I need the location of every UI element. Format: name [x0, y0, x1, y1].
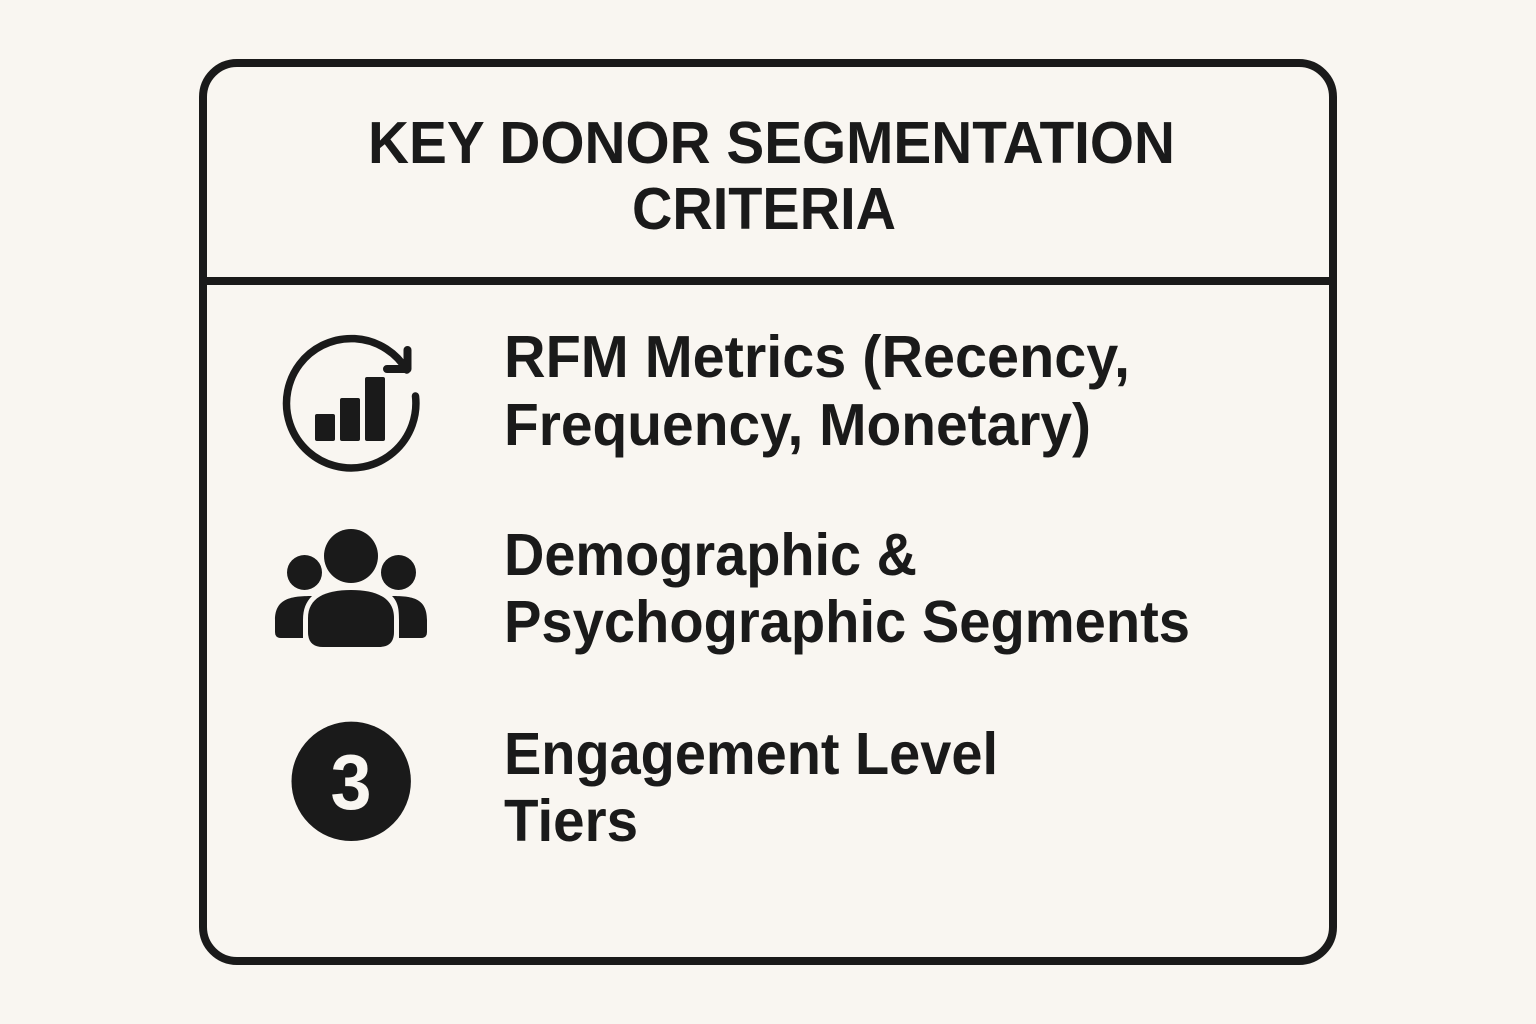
- text: engagement level tiers: Tiers: [504, 788, 638, 854]
- text: RFM metrics: RFM Metrics (Recency,: [504, 324, 1130, 390]
- text: demographic and psychographic segments: [504, 522, 1190, 655]
- icon: number three badge: [292, 722, 411, 841]
- icon: circular arrow with bar chart: [287, 339, 416, 468]
- text: RFM metrics: [504, 324, 1130, 458]
- title: KEY DONOR SEGMENTATION: [368, 110, 1175, 176]
- panel: criteria card: [203, 63, 1333, 961]
- text: engagement level tiers: Engagement Level: [504, 721, 998, 787]
- title: [368, 110, 1175, 242]
- icon: number three badge: 3: [330, 738, 372, 826]
- text: demographic and psychographic segments: Demographic &: [504, 522, 917, 588]
- text: engagement level tiers: [504, 721, 998, 854]
- title: CRITERIA: [632, 176, 896, 242]
- text: demographic and psychographic segments: Psychographic Segments: [504, 589, 1190, 655]
- icon: group of people: [275, 529, 427, 647]
- text: RFM metrics: Frequency, Monetary): [504, 392, 1091, 458]
